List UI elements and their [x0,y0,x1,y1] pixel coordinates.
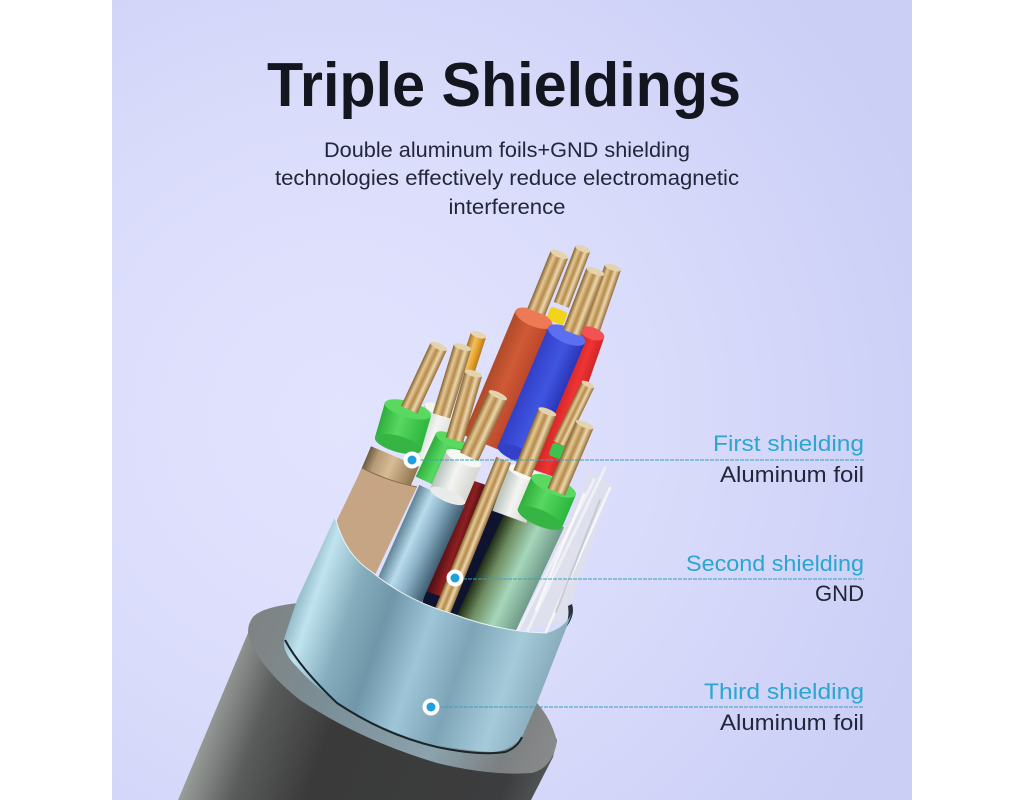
callout: first shielding [404,431,864,487]
cable illustration [178,243,622,800]
rear edge of foil [564,604,573,630]
dark cavity between conductors [420,480,520,640]
callout: third shielding [422,679,864,735]
label heading: First shielding [713,431,864,456]
description text: Double aluminum foils+GND shielding [324,139,690,162]
marker dot [404,452,420,468]
marker dot [446,570,464,586]
leader line [420,459,864,461]
rear small wires [404,329,595,474]
marker dot [422,698,440,716]
leader line [439,706,864,708]
outer jacket [178,603,557,800]
green foil pair [457,405,595,641]
long gold conductor [435,457,511,615]
label heading: Third shielding [704,679,864,704]
background panel [112,0,912,800]
description text: technologies effectively reduce electromagnetic [275,167,739,190]
first shielded pair: gold foil [310,340,448,610]
third shielding foil [284,517,572,752]
description text [275,139,739,219]
wire with green sleeve [416,368,483,491]
label detail: GND [815,581,864,606]
leader line [463,578,864,580]
callout: second shielding [446,551,864,606]
title: Triple Shieldings [267,51,741,120]
description text: interference [448,196,566,219]
large power wires [427,243,622,599]
jacket end face [248,603,557,774]
label heading: Second shielding [686,551,864,576]
label detail: Aluminum foil [720,462,864,487]
silver foil pair [375,388,508,604]
label detail: Aluminum foil [720,710,864,735]
clear fibres [518,468,612,632]
